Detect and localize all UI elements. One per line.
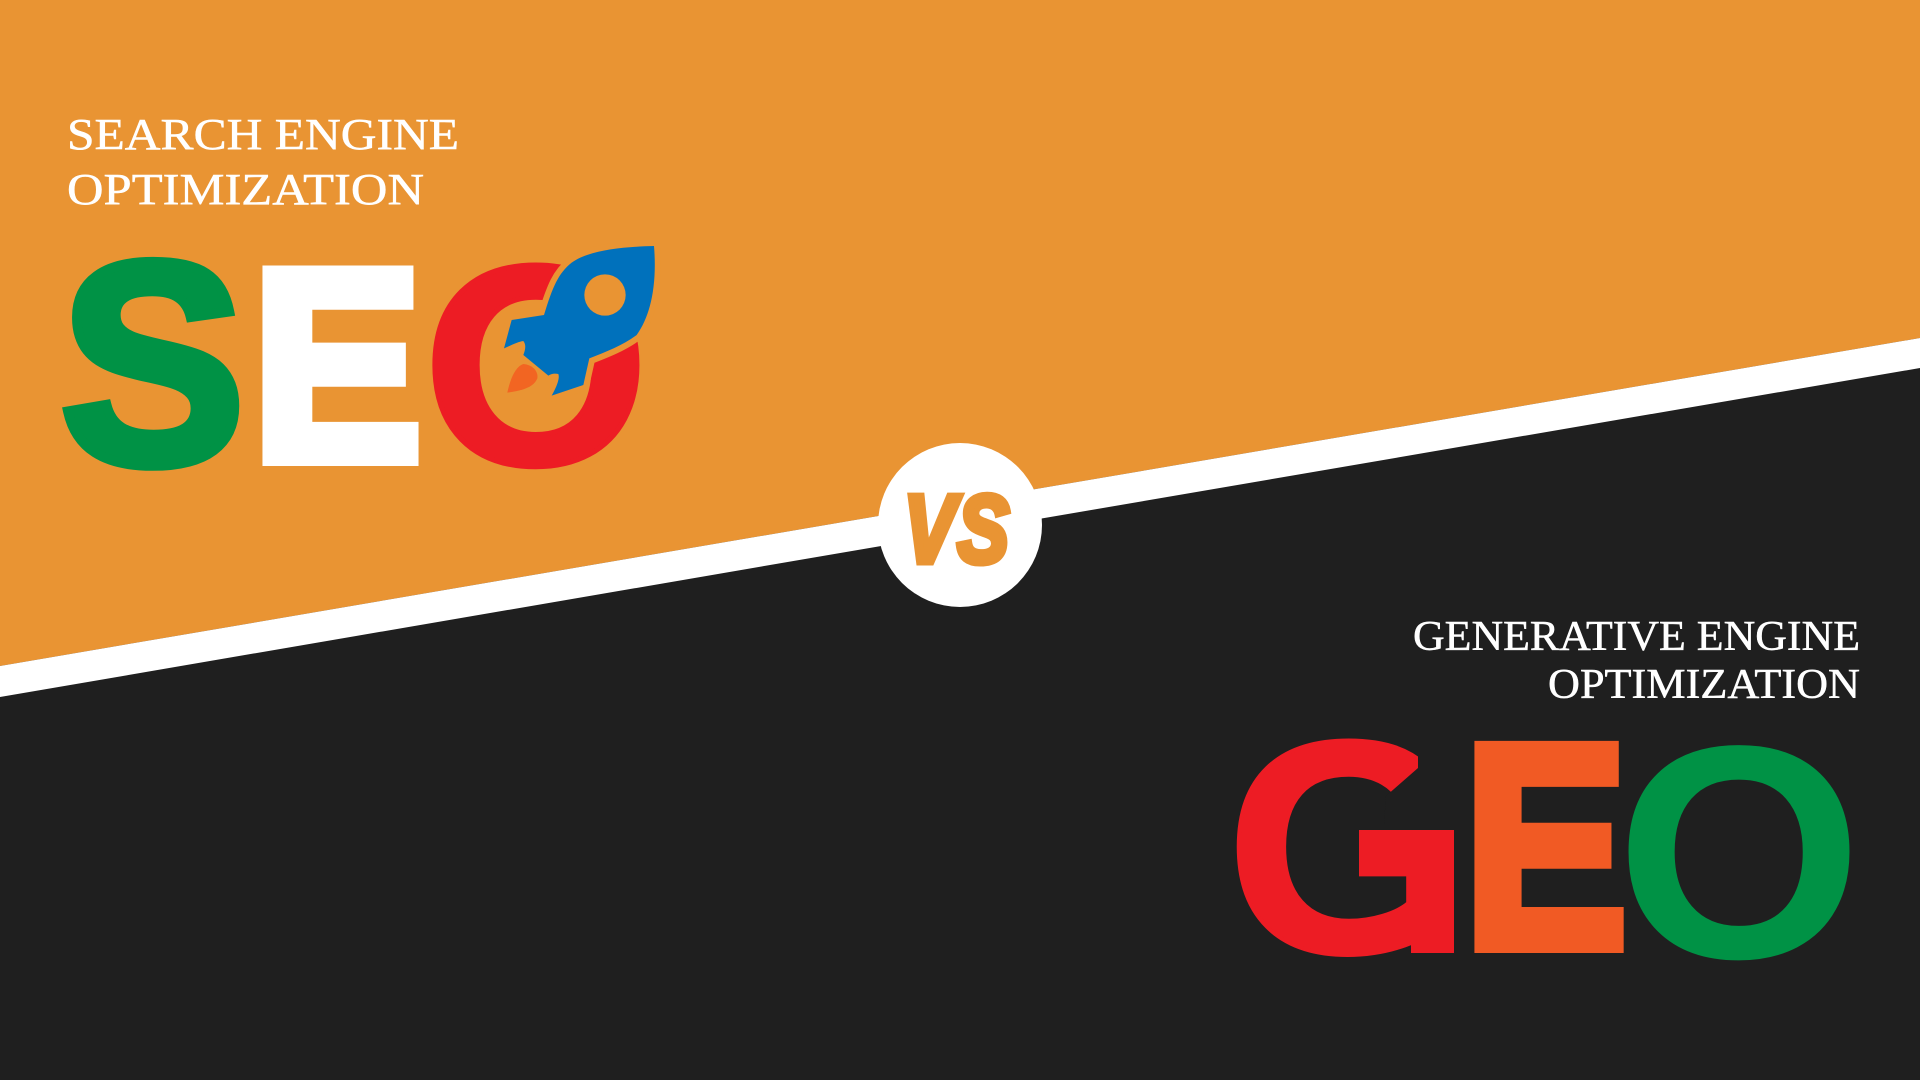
letter S: S [60,202,245,524]
rocket flame [507,364,537,393]
heading: generative engine optimization [1413,614,1860,708]
letter E: E [252,214,422,517]
heading: search engine optimization [67,110,459,214]
letter E: E [1464,685,1627,1007]
icon: rocket [504,246,655,396]
heading: generative engine optimization: GENERATIVE ENGINE [1413,614,1860,660]
rocket window [584,274,626,316]
heading: generative engine optimization: OPTIMIZATION [1548,662,1860,708]
VS badge [878,443,1042,607]
GEO logo wordmark [1226,679,1863,1022]
SEO logo wordmark [60,202,649,525]
heading: search engine optimization: OPTIMIZATION [67,165,424,214]
heading: search engine optimization: SEARCH ENGINE [67,110,459,159]
letter O: O [423,207,649,525]
badge circle [878,443,1042,607]
panel: orange upper background [0,0,1920,666]
letter O: O [1616,682,1863,1022]
letter G: G [1226,679,1469,1017]
diagonal white divider band [0,338,1920,697]
rocket body [504,246,655,396]
VS label: VS [904,476,1011,583]
